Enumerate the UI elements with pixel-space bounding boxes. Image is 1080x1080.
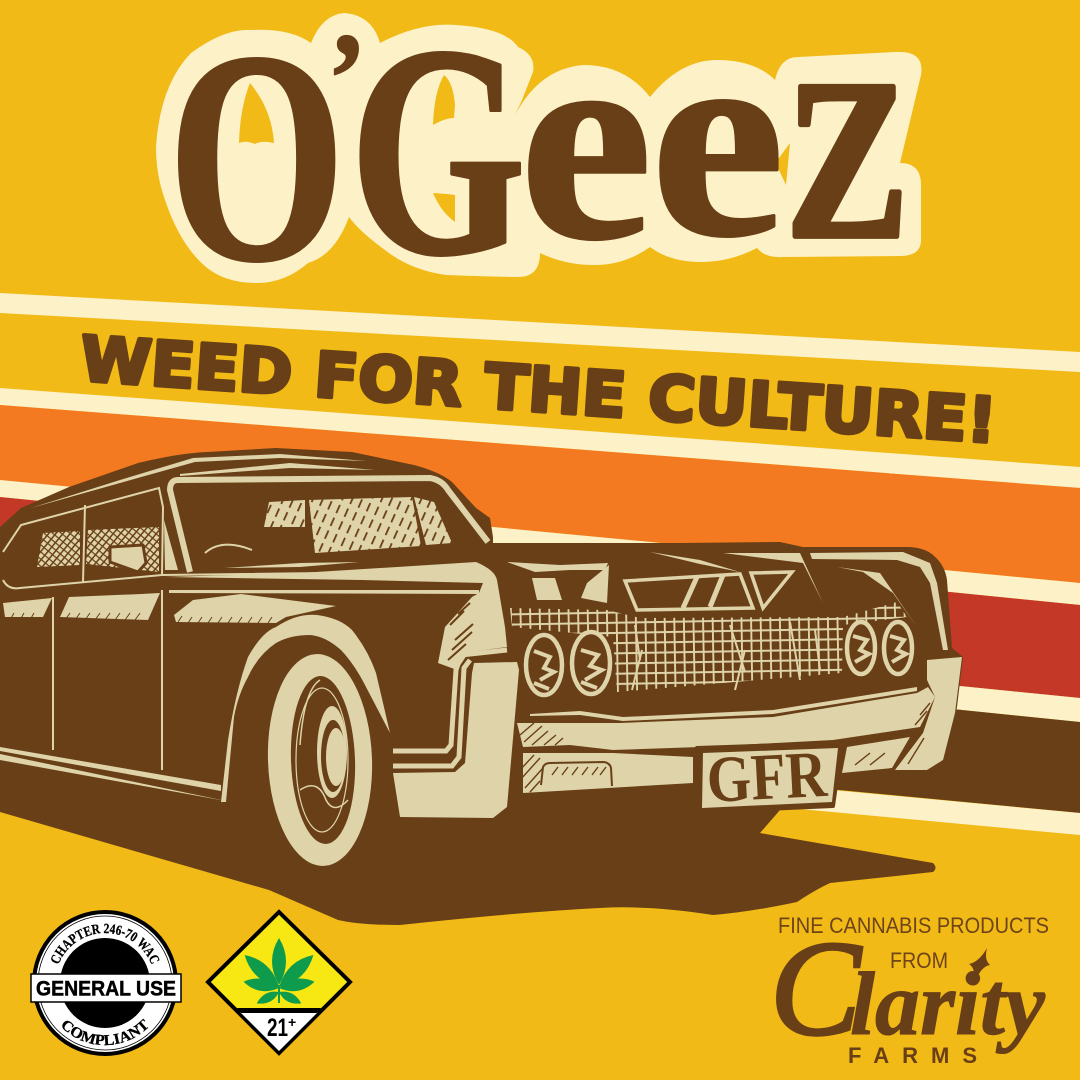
hood creases (650, 552, 948, 650)
side window reflections (37, 527, 159, 572)
bumper trim lines (393, 650, 507, 766)
badge band (31, 974, 181, 1002)
side bumper (393, 662, 519, 818)
clarity wordmark: C (770, 914, 862, 1064)
badge band text: GENERAL USE (36, 978, 176, 1000)
rim (288, 675, 358, 845)
brand line: FINE CANNABIS PRODUCTS (778, 913, 1049, 938)
title: O'Geez logo (156, 0, 921, 324)
title lettering: Z (786, 32, 909, 286)
arc top path (55, 933, 155, 983)
badge disc (34, 912, 176, 1054)
hubcap rings (296, 688, 348, 832)
age plus: + (288, 1014, 296, 1030)
title lettering (168, 0, 909, 324)
age text: 21 (267, 1014, 288, 1042)
plate face (702, 748, 838, 808)
icon: 21+ cannabis diamond (208, 912, 350, 1053)
arc bottom path (43, 983, 167, 1045)
door seams (53, 590, 162, 770)
rocker trim (0, 747, 226, 801)
v emblem (751, 572, 792, 608)
tagline: WEED FOR THE CULTURE! (78, 322, 999, 457)
title halo (156, 13, 921, 283)
illustration: vintage car (0, 448, 963, 925)
badge center (60, 938, 150, 1028)
diamond divider (237, 1008, 321, 1013)
from text: FROM (890, 948, 948, 973)
belt line and fender (165, 562, 507, 670)
bumper end (895, 657, 962, 770)
grille (510, 602, 907, 692)
badge inner ring (38, 916, 172, 1050)
side window frame (3, 488, 480, 588)
icon: sparkle (969, 948, 990, 984)
bumper top chrome (530, 687, 917, 721)
car silhouette and shadow (0, 448, 963, 925)
door crease (169, 590, 479, 594)
wheel (264, 652, 376, 868)
retro stripes (0, 293, 1080, 835)
clarity wordmark: larity (850, 955, 1046, 1054)
bumper lower right (842, 737, 910, 773)
bumper hatching (520, 703, 930, 792)
badge bottom text: COMPLIANT (62, 1018, 148, 1046)
title lettering: ’ (327, 8, 367, 151)
door highlights (3, 593, 336, 623)
bumper main (517, 687, 935, 750)
diamond lower section (240, 1012, 318, 1051)
hood vent bars (683, 575, 723, 608)
steering wheel and dash (205, 545, 252, 553)
title counters (239, 75, 790, 222)
window pillar (164, 520, 178, 570)
badge: general use compliant (30, 910, 182, 1056)
brand block: clarity farms (770, 913, 1049, 1068)
plate text: GFR (705, 738, 830, 817)
badge top text: CHAPTER 246-70 WAC (51, 924, 160, 964)
headlight reflections (534, 636, 906, 689)
headlights (526, 622, 912, 695)
tyre (264, 652, 376, 868)
farms text: FARMS (848, 1043, 990, 1068)
plate surround (697, 743, 842, 812)
grille slashes (632, 622, 820, 690)
bumper lower (523, 753, 693, 793)
hood vent (625, 574, 753, 610)
windshield reflections (264, 497, 452, 553)
wheel arch (221, 615, 390, 802)
diamond body (208, 912, 350, 1053)
highlight hatching (10, 603, 473, 660)
cannabis leaf (240, 938, 318, 1007)
hood panels (507, 562, 609, 603)
windshield frame (170, 478, 488, 572)
side mirror (110, 545, 146, 572)
license plate (697, 738, 842, 817)
roof highlights (31, 454, 375, 508)
